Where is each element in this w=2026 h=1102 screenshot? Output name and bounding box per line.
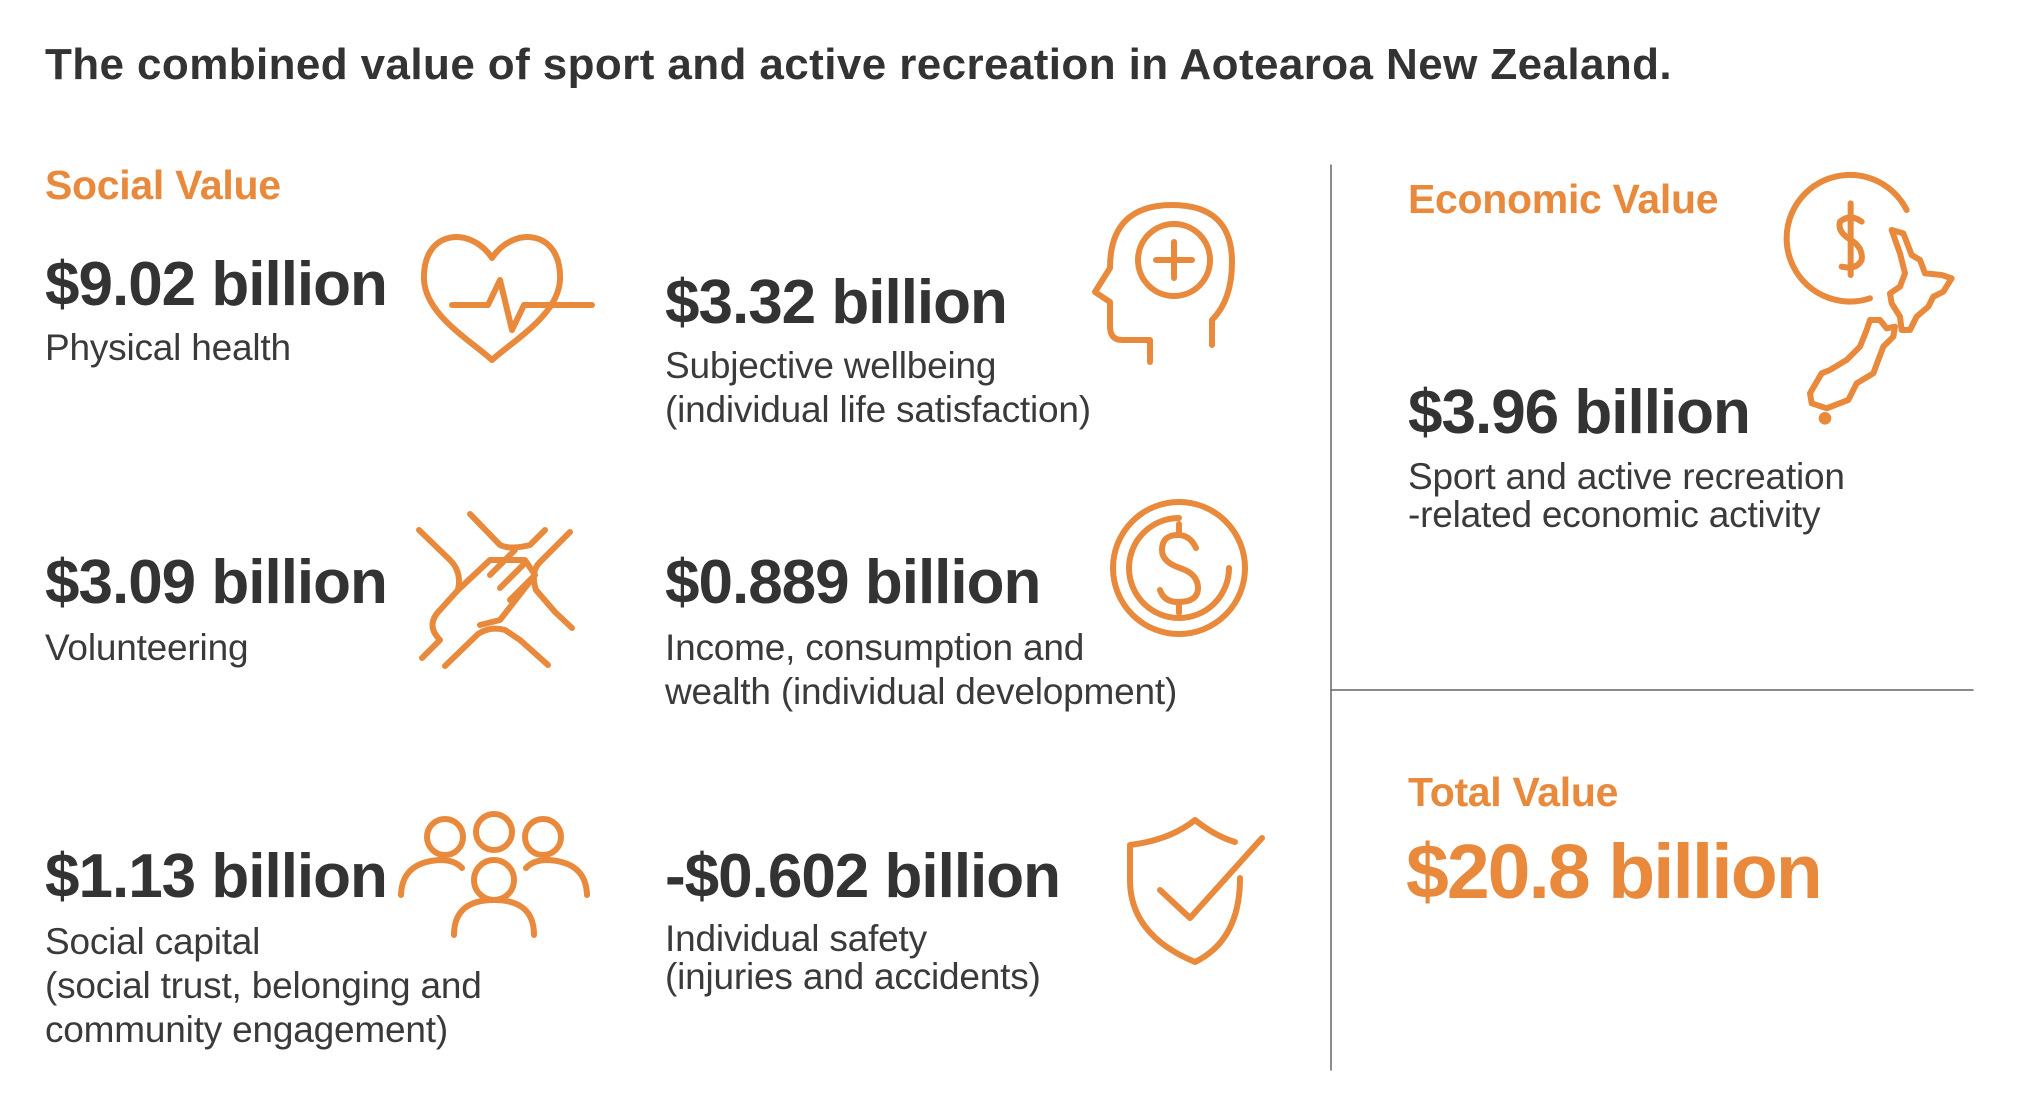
stat: social capital: Social capital [45, 921, 260, 962]
stat: subjective wellbeing: (individual life satisfaction) [665, 389, 1091, 430]
stat: economic activity: $3.96 billion [1408, 378, 1750, 447]
icon: shield check [1130, 820, 1262, 962]
stat: volunteering: Volunteering [45, 627, 248, 668]
stat: social capital: $1.13 billion [45, 842, 387, 911]
stat: individual safety: (injuries and accidents) [665, 956, 1041, 997]
stat: social capital: community engagement) [45, 1009, 448, 1050]
stat: subjective wellbeing: $3.32 billion [665, 268, 1007, 337]
icon: hands [419, 514, 572, 666]
stat: physical health: $9.02 billion [45, 250, 387, 319]
stat: economic activity [1408, 378, 1845, 535]
stat: volunteering: $3.09 billion [45, 548, 387, 617]
stat: economic activity: Sport and active recreation [1408, 456, 1845, 497]
icon: people [401, 814, 587, 935]
stat: individual safety [665, 842, 1060, 997]
stat: income: $0.889 billion [665, 548, 1040, 617]
stat: income [665, 548, 1177, 712]
icon: heart pulse [424, 237, 592, 360]
stat: subjective wellbeing [665, 268, 1091, 430]
icon: coin [1113, 502, 1245, 634]
heading: total value: Total Value [1408, 769, 1618, 815]
heading: economic value: Economic Value [1408, 176, 1718, 222]
heading: social value: Social Value [45, 162, 281, 208]
stat: individual safety: -$0.602 billion [665, 842, 1060, 911]
stat: income: wealth (individual development) [665, 671, 1177, 712]
stat: physical health: Physical health [45, 327, 291, 368]
stat: income: Income, consumption and [665, 627, 1084, 668]
icon: NZ map dollar [1787, 175, 1952, 422]
stat: social capital [45, 842, 482, 1050]
stat: individual safety: Individual safety [665, 918, 927, 959]
stat: subjective wellbeing: Subjective wellbeing [665, 345, 996, 386]
stat: physical health [45, 250, 387, 368]
title: The combined value of sport and active recreation in Aotearoa New Zealand. [45, 40, 1672, 89]
stat: economic activity: -related economic activity [1408, 494, 1820, 535]
icon: head with plus [1095, 205, 1232, 362]
stat: volunteering [45, 548, 387, 668]
total value number: $20.8 billion [1406, 829, 1821, 915]
stat: social capital: (social trust, belonging and [45, 965, 482, 1006]
